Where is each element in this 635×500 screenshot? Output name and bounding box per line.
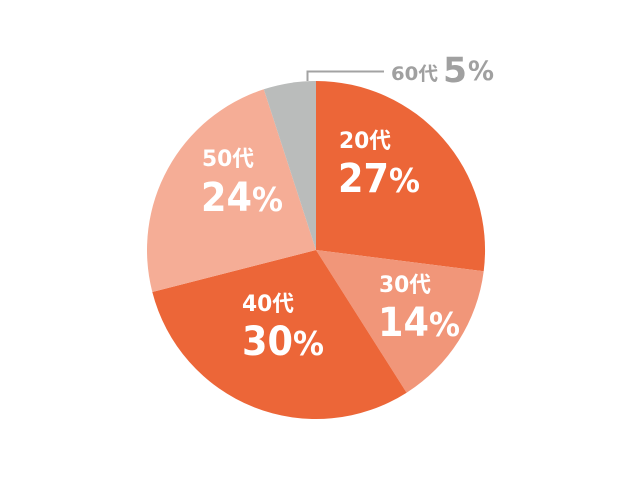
slice: 40s 30% (152, 250, 407, 419)
label: 50s 24% (201, 147, 283, 221)
label: 50s 24%: 50代 (202, 147, 254, 172)
label: 20s 27%: 27 (338, 156, 389, 202)
label: 40s 30%: 30 (242, 319, 293, 365)
label: 40s 30%: 40代 (242, 292, 294, 317)
label: 60s 5%: % (468, 56, 494, 87)
label: 60s 5%: 60代 (391, 63, 438, 85)
slice: 50s 24% (147, 89, 316, 292)
label: 40s 30%: % (293, 324, 324, 363)
label: 50s 24%: % (252, 180, 283, 219)
leader line: 60s (308, 72, 384, 81)
slice: 20s 27% (316, 81, 485, 271)
label: 30s 14%: 30代 (379, 273, 431, 298)
label: 30s 14%: 14 (378, 300, 429, 346)
label: 60s 5% (391, 51, 494, 91)
label: 30s 14% (378, 273, 460, 346)
label: 20s 27%: % (389, 161, 420, 200)
label: 30s 14%: % (429, 305, 460, 344)
label: 20s 27% (338, 129, 420, 202)
slice: 60s 5% (264, 81, 316, 250)
label: 50s 24%: 24 (201, 175, 252, 221)
label: 20s 27%: 20代 (339, 129, 391, 154)
label: 40s 30% (242, 292, 324, 365)
label: 60s 5%: 5 (443, 51, 467, 91)
slice: 30s 14% (316, 250, 484, 393)
